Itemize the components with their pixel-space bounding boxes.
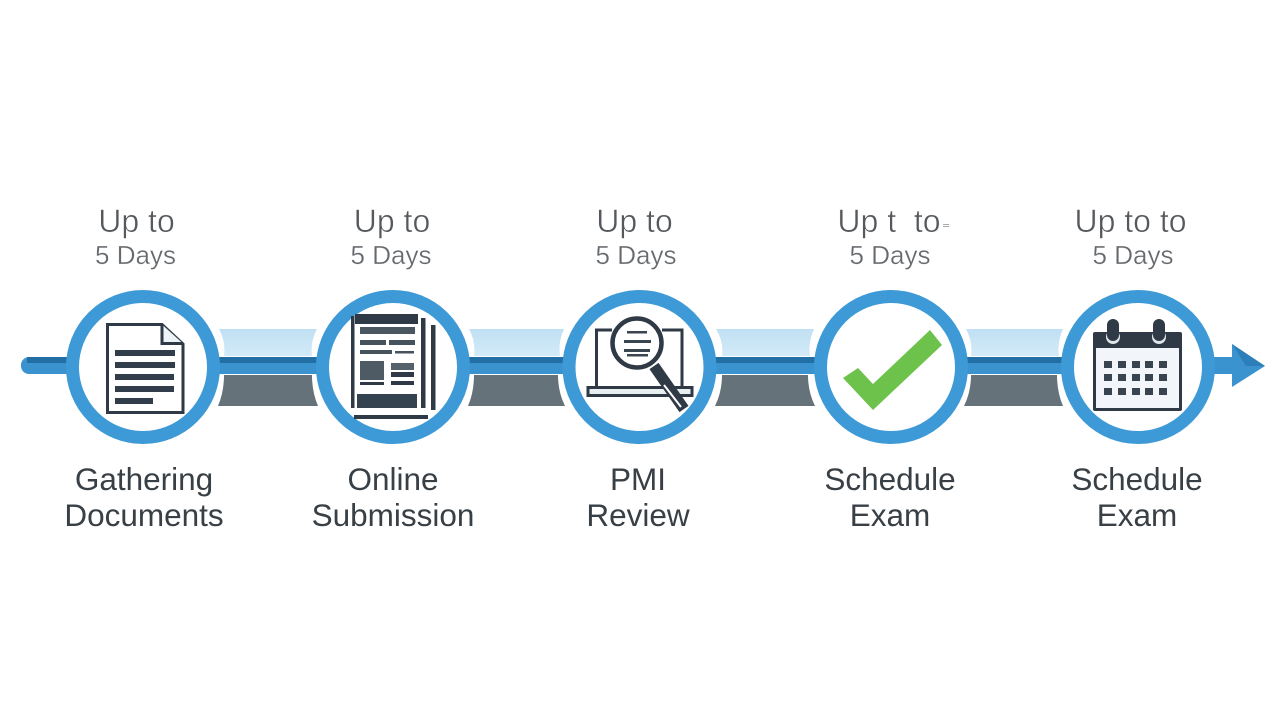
connector band 2 — [468, 329, 565, 406]
step 1 duration: 5 Days — [95, 240, 176, 270]
step 2 duration — [351, 203, 431, 270]
step 4 duration — [837, 203, 949, 270]
step 2: online submission — [312, 203, 474, 533]
step 5 duration: Up to to — [1074, 203, 1187, 239]
step 1 label: Gathering — [75, 461, 213, 497]
timeline arrow — [21, 344, 1265, 387]
step 2 label: Submission — [312, 497, 474, 533]
step 2 ring — [322, 296, 464, 438]
step 3: PMI review — [569, 203, 710, 533]
step 2 duration: 5 Days — [351, 240, 431, 270]
step 4 duration: 5 Days — [850, 240, 930, 270]
step 5 label: Exam — [1097, 497, 1177, 533]
step 4 ring — [820, 296, 962, 438]
step 1 label — [64, 461, 224, 533]
connector band 1 — [218, 329, 318, 406]
step 1: gathering documents — [64, 203, 224, 533]
step 5 label — [1071, 461, 1203, 533]
step 1 duration: Up to — [98, 203, 175, 239]
icon: laptop with magnifier — [588, 318, 692, 409]
step 1 ring — [72, 296, 214, 438]
step 2 duration: Up to — [354, 203, 430, 239]
step 3 duration: Up to — [596, 203, 673, 239]
step 2 label: Online — [347, 461, 439, 497]
step 4 label: Exam — [850, 497, 930, 533]
icon: calendar — [1093, 319, 1182, 411]
connector band 4 — [964, 329, 1063, 406]
step 3 label: Review — [586, 497, 690, 533]
step 3 label — [586, 461, 690, 533]
step 5 duration — [1074, 203, 1187, 270]
step 4: schedule exam — [820, 203, 962, 533]
step 4 label — [824, 461, 956, 533]
step 3 label: PMI — [610, 461, 666, 497]
icon: green check mark — [843, 330, 942, 410]
step 3 ring — [569, 296, 710, 438]
step 5 ring — [1068, 296, 1208, 438]
icon: document — [108, 324, 183, 412]
step 3 duration — [596, 203, 676, 270]
step 4 duration: Up t to — [837, 203, 941, 239]
step 1 label: Documents — [64, 497, 224, 533]
step 5 label: Schedule — [1071, 461, 1203, 497]
connector band 3 — [715, 329, 815, 406]
step 1 duration — [95, 203, 176, 270]
icon: form — [351, 314, 436, 419]
step 2 label — [312, 461, 474, 533]
step 4 label: Schedule — [824, 461, 956, 497]
step 3 duration: 5 Days — [596, 240, 676, 270]
step 5 duration: 5 Days — [1093, 240, 1173, 270]
step 5: schedule exam — [1068, 203, 1208, 533]
